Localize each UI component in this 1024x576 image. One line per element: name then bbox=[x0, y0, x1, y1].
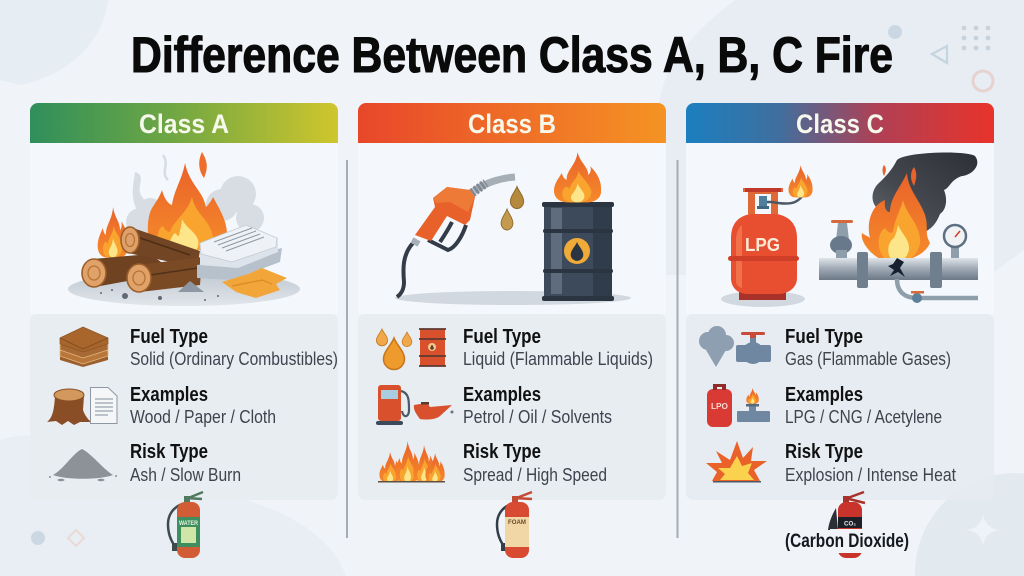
info box bbox=[30, 314, 338, 500]
row: risk type bbox=[130, 441, 241, 485]
row: fuel type: Fuel Type bbox=[130, 326, 208, 348]
row: examples: Petrol / Oil / Solvents bbox=[463, 407, 612, 427]
row: fuel type: Solid (Ordinary Combustibles) bbox=[130, 349, 338, 369]
info box bbox=[358, 314, 666, 500]
main pipe bbox=[819, 258, 978, 280]
hose bbox=[397, 243, 413, 297]
icon: water extinguisher: WATER bbox=[179, 520, 198, 527]
icon: foam extinguisher bbox=[497, 492, 532, 558]
spout bbox=[474, 177, 515, 191]
drops bbox=[510, 186, 524, 209]
icon: liquid drops and drum bbox=[376, 329, 446, 370]
panel: Class C bbox=[686, 103, 994, 558]
row: fuel type: Fuel Type bbox=[463, 326, 541, 348]
illustration: LPG cylinder bbox=[721, 165, 813, 307]
row: examples bbox=[130, 384, 276, 427]
row: risk type: Ash / Slow Burn bbox=[130, 465, 241, 485]
icon: water extinguisher bbox=[168, 492, 203, 558]
icon: tree stump and document bbox=[47, 388, 117, 425]
lower pipe bbox=[897, 279, 978, 298]
row: fuel type bbox=[785, 326, 951, 369]
paper stack bbox=[197, 248, 282, 280]
row: fuel type bbox=[130, 326, 338, 369]
front log bbox=[138, 257, 202, 292]
panel: Class A bbox=[30, 103, 338, 558]
row: examples: LPG / CNG / Acetylene bbox=[785, 407, 942, 427]
divider bbox=[676, 160, 678, 538]
icon: spreading flames bbox=[378, 441, 445, 482]
title: Difference Between Class A, B, C Fire bbox=[131, 27, 893, 83]
divider bbox=[346, 160, 348, 538]
row: examples bbox=[463, 384, 612, 427]
main flame bbox=[148, 163, 227, 250]
row: fuel type: Fuel Type bbox=[785, 326, 863, 348]
illustration: gas pipe with flame and smoke bbox=[819, 153, 978, 303]
gauge bbox=[951, 246, 959, 259]
row: risk type: Risk Type bbox=[130, 441, 208, 463]
row: examples: Examples bbox=[463, 384, 541, 406]
icon: fuel pump and oil can bbox=[376, 385, 454, 425]
icon: small LPG cylinder and burner bbox=[707, 384, 770, 427]
icon: explosion bbox=[706, 441, 767, 482]
icon: CO2 extinguisher bbox=[828, 492, 870, 558]
illustration: burning logs, paper and cloth bbox=[68, 152, 300, 306]
left log bbox=[93, 254, 175, 287]
panel: Class B bbox=[358, 103, 666, 558]
handle bbox=[428, 222, 466, 250]
row: risk type bbox=[785, 441, 956, 485]
icon: ash pile bbox=[49, 449, 117, 481]
header: Class C: Class C bbox=[796, 109, 884, 139]
header: Class B bbox=[358, 103, 666, 143]
header: Class B: Class B bbox=[468, 109, 556, 139]
left valve bbox=[836, 223, 849, 240]
illustration: LPG cylinder: LPG bbox=[745, 235, 780, 255]
row: examples: Examples bbox=[130, 384, 208, 406]
label: carbon dioxide: (Carbon Dioxide) bbox=[785, 531, 909, 552]
big flame bbox=[862, 173, 930, 259]
row: examples: Examples bbox=[785, 384, 863, 406]
row: examples: Wood / Paper / Cloth bbox=[130, 407, 276, 427]
row: fuel type: Liquid (Flammable Liquids) bbox=[463, 349, 653, 369]
ash bbox=[178, 281, 204, 292]
icon: gas cloud and valve bbox=[699, 326, 771, 367]
row: risk type bbox=[463, 441, 607, 485]
icon: stacked wood bbox=[60, 327, 108, 367]
icon: small LPG cylinder and burner: LPO bbox=[711, 402, 728, 411]
header: Class A: Class A bbox=[139, 109, 229, 139]
row: risk type: Explosion / Intense Heat bbox=[785, 465, 956, 485]
icon: foam extinguisher: FOAM bbox=[508, 519, 526, 526]
row: examples bbox=[785, 384, 942, 427]
row: fuel type bbox=[463, 326, 653, 369]
cloth bbox=[222, 268, 287, 298]
barrel bbox=[544, 204, 612, 298]
info box bbox=[686, 314, 994, 500]
illustration: fuel nozzle and burning barrel bbox=[395, 152, 631, 305]
row: fuel type: Gas (Flammable Gases) bbox=[785, 349, 951, 369]
header: Class C bbox=[686, 103, 994, 143]
upper log bbox=[128, 227, 200, 264]
header: Class A bbox=[30, 103, 338, 143]
icon: CO2 extinguisher: CO₂ bbox=[844, 520, 856, 528]
nozzle body bbox=[415, 187, 475, 241]
row: risk type: Spread / High Speed bbox=[463, 465, 607, 485]
row: risk type: Risk Type bbox=[463, 441, 541, 463]
row: risk type: Risk Type bbox=[785, 441, 863, 463]
